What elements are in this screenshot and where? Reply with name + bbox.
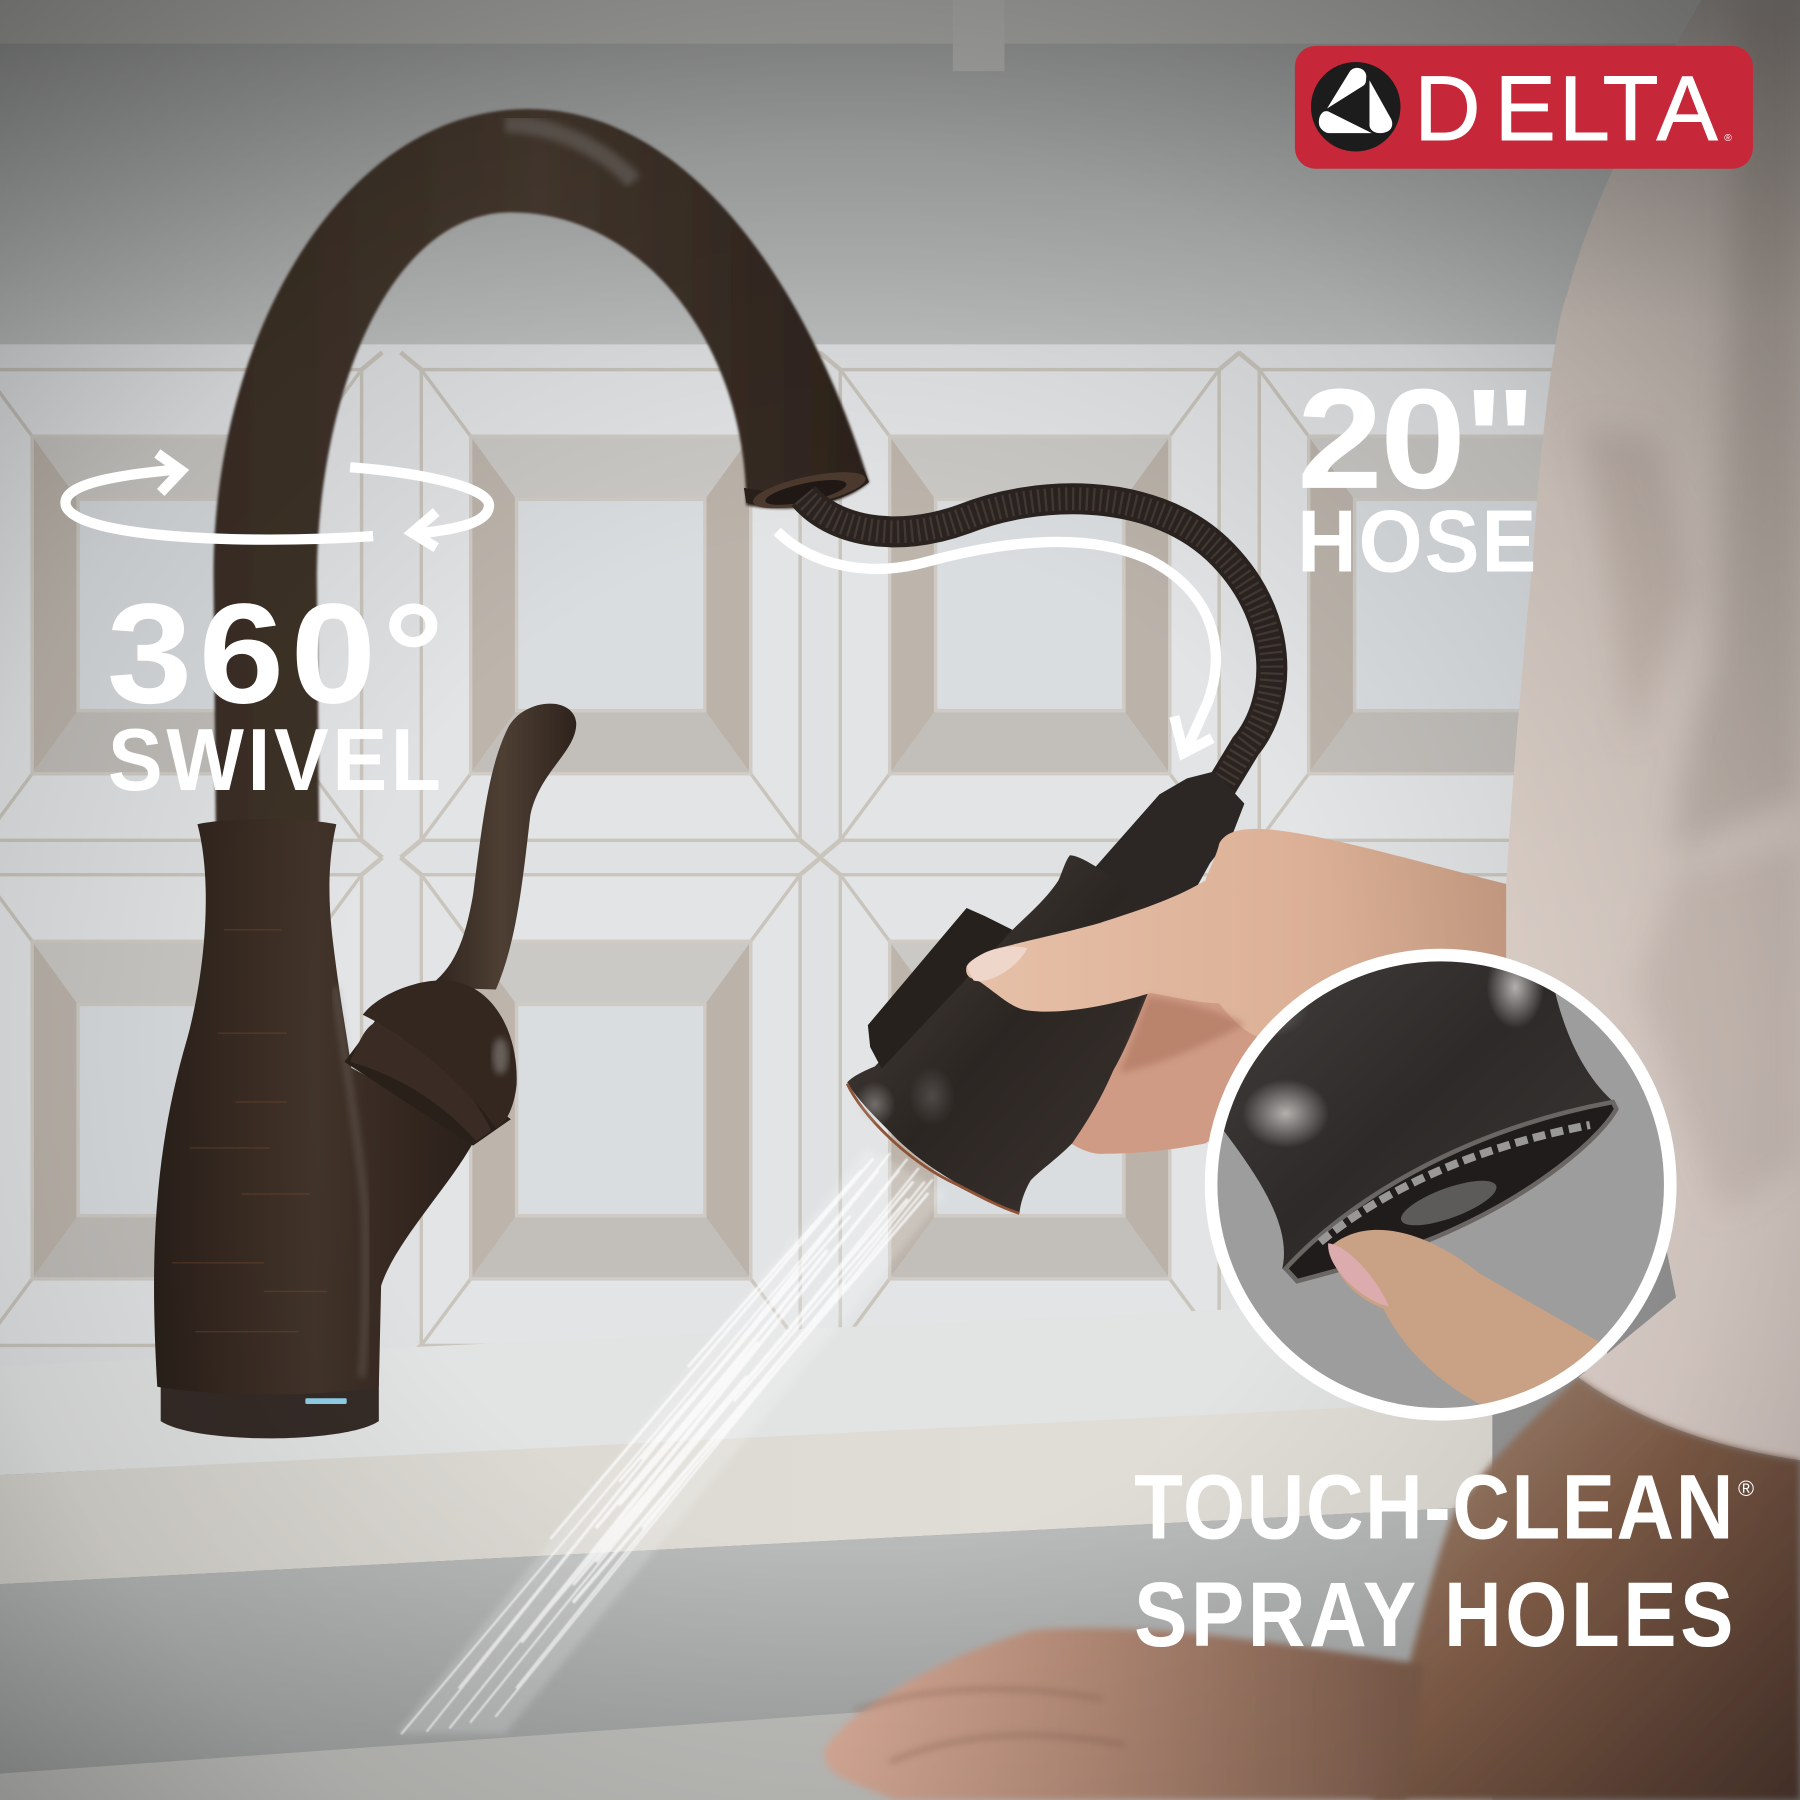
- inset: spray head metal: [1224, 961, 1612, 1270]
- hose: [804, 496, 1272, 790]
- faucet spout: [214, 109, 869, 829]
- logo: Delta: ®: [1724, 133, 1732, 144]
- spray head body: [847, 855, 1152, 1213]
- background: marble tile wall: [0, 342, 1659, 1375]
- arrow: swivel: [65, 453, 489, 548]
- hand: index finger and back: [966, 829, 1506, 1073]
- label: 360° swivel: SWIVEL: [108, 711, 441, 809]
- shirt: fold shadows: [1578, 0, 1800, 1217]
- logo: Delta: DELTA: [1414, 58, 1719, 160]
- faucet body: [154, 819, 476, 1394]
- arrow: hose length: [777, 532, 1216, 753]
- label: touch-clean spray holes: [1134, 1456, 1754, 1666]
- label: touch-clean spray holes: SPRAY HOLES: [1134, 1564, 1733, 1666]
- label: 360° swivel: [107, 575, 444, 809]
- label: 20" hose: HOSE: [1297, 493, 1536, 591]
- inset: finger: [1333, 1230, 1599, 1404]
- label: touch-clean spray holes: TOUCH-CLEAN: [1134, 1456, 1733, 1559]
- background: countertop and cabinet: [0, 1297, 1492, 1800]
- label: 360° swivel: 360°: [107, 575, 444, 733]
- faucet base: [161, 1378, 379, 1438]
- spray head: [847, 771, 1244, 1213]
- faucet handle: [344, 704, 576, 1146]
- label: 20" hose: 20": [1297, 360, 1536, 519]
- inset: spray holes: [1320, 1125, 1590, 1242]
- icon: Delta triangle mark: [1311, 62, 1401, 152]
- logo: Delta: [1295, 46, 1753, 169]
- spray head button: [868, 908, 1012, 1069]
- callout: touch-clean inset circle: [1211, 918, 1670, 1423]
- water spray: [396, 1148, 947, 1733]
- label: touch-clean spray holes: ®: [1738, 1476, 1754, 1501]
- person: lower hand: [824, 1628, 1423, 1800]
- person: shirt: [1503, 0, 1800, 1460]
- hand: lower fingers: [1062, 987, 1297, 1154]
- faucet: [154, 109, 869, 1438]
- hose connector: [1091, 771, 1244, 918]
- background: upper wall: [0, 0, 1800, 367]
- person: forearm: [1372, 1378, 1800, 1800]
- inset: spray face: [1286, 1102, 1616, 1281]
- label: 20" hose: [1297, 360, 1536, 591]
